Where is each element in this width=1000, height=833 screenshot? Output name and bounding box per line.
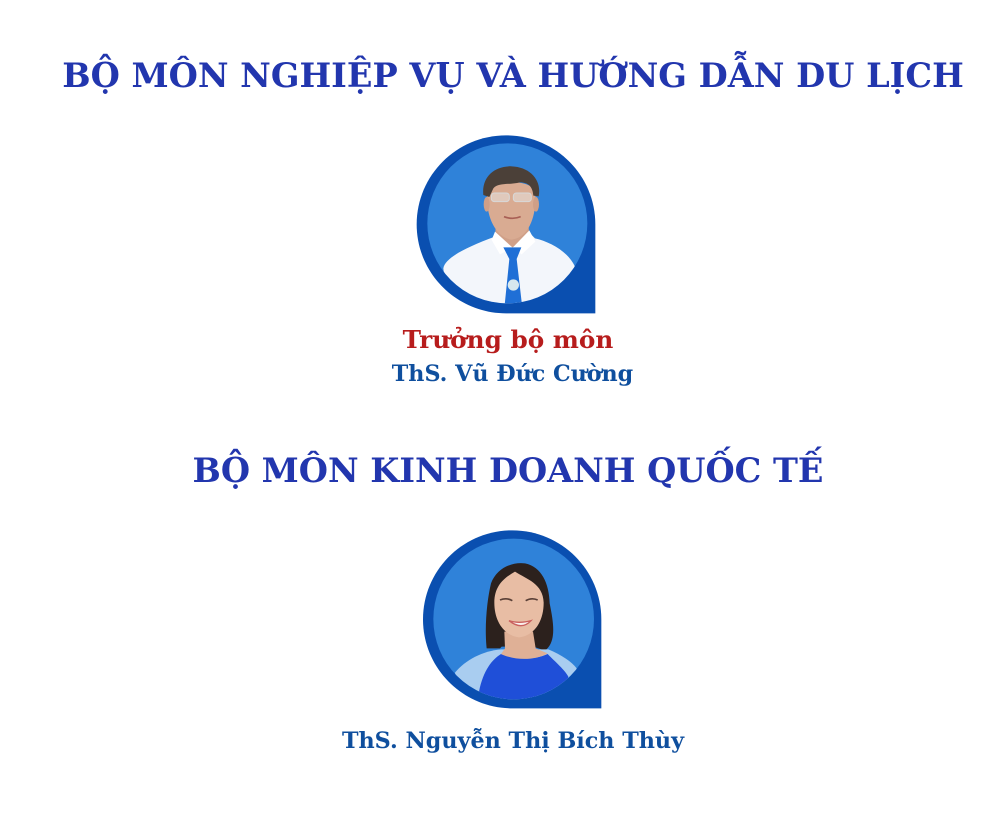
portrait: department lecturer: [423, 530, 602, 708]
name label: ThS. Vũ Đức Cường: [392, 361, 633, 387]
name label: ThS. Nguyễn Thị Bích Thùy: [342, 728, 684, 754]
title: department of tourism: BỘ MÔN NGHIỆP VỤ VÀ HƯỚNG DẪN DU LỊCH: [62, 55, 964, 95]
title: department of international business: BỘ MÔN KINH DOANH QUỐC TẾ: [193, 451, 823, 490]
portrait: head of department: [416, 135, 596, 314]
role label: Trưởng bộ môn: [403, 325, 613, 354]
